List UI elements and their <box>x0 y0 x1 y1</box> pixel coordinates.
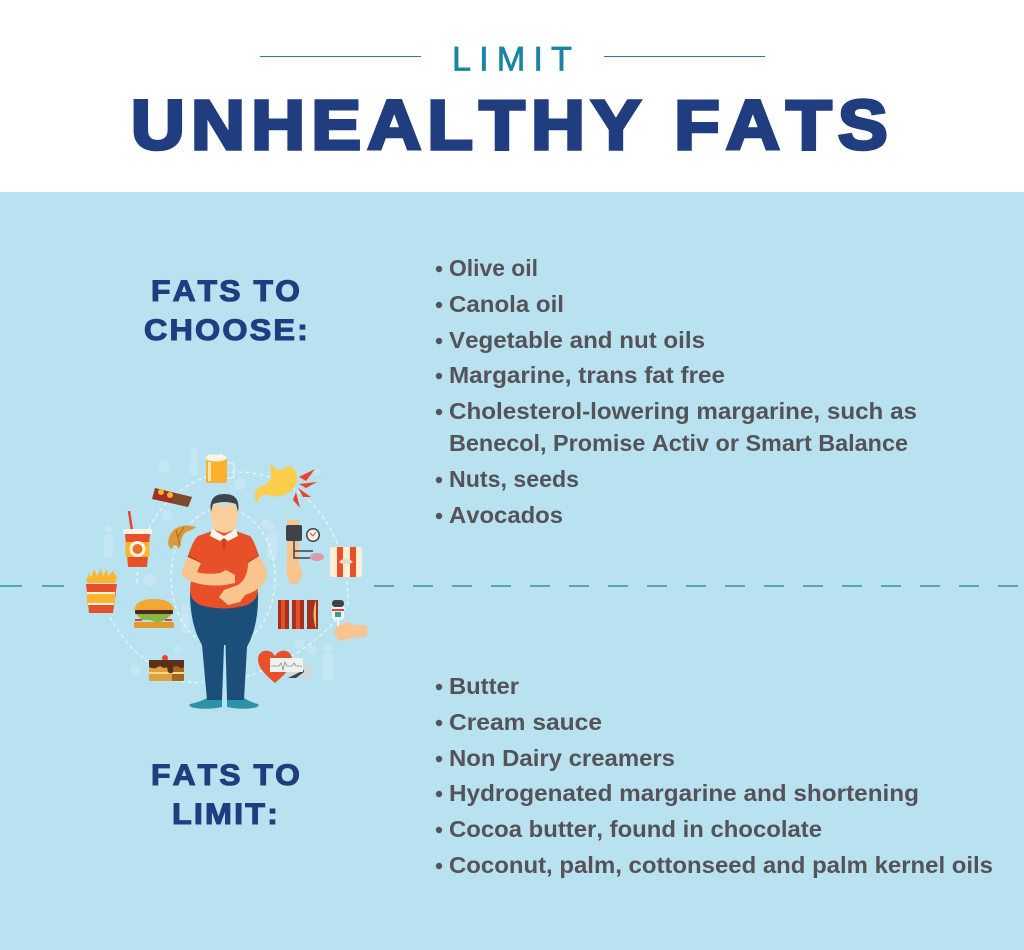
list: fats to choose: Olive oil <box>449 255 538 281</box>
icon: chocolate cake <box>149 655 184 681</box>
list: fats to choose: Margarine, trans fat free <box>449 362 725 388</box>
list: fats to choose: Benecol, Promise Activ or Smart Balance <box>449 430 908 456</box>
list: fats to choose: Avocados <box>449 502 563 528</box>
list: fats to choose: Cholesterol-lowering margarine, such as <box>449 398 917 424</box>
figure: man holding his stomach <box>182 494 267 709</box>
icon: soda cup <box>123 511 152 567</box>
right arm and hand <box>219 556 267 605</box>
list: fats to limit <box>436 673 993 878</box>
illustration: overweight man with health risks <box>86 448 367 709</box>
list: fats to choose: Vegetable and nut oils <box>449 327 705 353</box>
heading: fats to limit: LIMIT: <box>172 798 280 831</box>
list: fats to limit: Hydrogenated margarine and shortening <box>449 780 919 806</box>
icon: beer mug <box>206 454 234 483</box>
title block: LIMIT <box>452 40 580 78</box>
trousers <box>190 592 258 700</box>
icon: chocolate bar <box>152 488 192 507</box>
icon: glucose meter and finger <box>332 600 367 641</box>
icon: knee joint <box>330 547 362 577</box>
collar and placket <box>210 529 238 541</box>
icon: clogged arteries <box>278 600 318 629</box>
icon: heart with ecg <box>258 651 310 683</box>
icon: hamburger <box>134 599 174 628</box>
list: fats to limit: Coconut, palm, cottonseed and palm kernel oils <box>449 852 993 878</box>
heading: fats to limit: FATS TO <box>151 759 302 792</box>
list: fats to limit: Cocoa butter, found in chocolate <box>449 816 822 842</box>
list: fats to choose <box>436 255 917 528</box>
title block: UNHEALTHY FATS <box>131 86 894 164</box>
icon: croissant <box>168 525 196 549</box>
list: fats to choose: Canola oil <box>449 291 564 317</box>
heading: fats to choose: FATS TO <box>151 275 302 308</box>
heading: fats to choose: CHOOSE: <box>144 314 310 347</box>
list: fats to choose: Nuts, seeds <box>449 466 579 492</box>
icon: painful stomach <box>255 465 317 508</box>
panel: light blue background <box>0 192 1024 950</box>
shoes <box>190 698 258 709</box>
dashed orbit rings <box>110 472 348 683</box>
title block <box>131 40 894 164</box>
heading: fats to limit <box>151 759 302 831</box>
faint background icons <box>104 448 333 680</box>
dashed divider <box>0 585 1024 587</box>
list: fats to limit: Non Dairy creamers <box>449 745 675 771</box>
list: fats to limit: Cream sauce <box>449 709 602 735</box>
list: fats to limit: Butter <box>449 673 519 699</box>
heading: fats to choose <box>144 275 310 347</box>
icon: french fries <box>86 568 117 613</box>
neck <box>215 525 233 539</box>
head and hair <box>211 505 238 533</box>
left arm and hand <box>182 557 235 586</box>
shirt <box>188 531 259 608</box>
icon: blood pressure cuff <box>286 520 324 584</box>
